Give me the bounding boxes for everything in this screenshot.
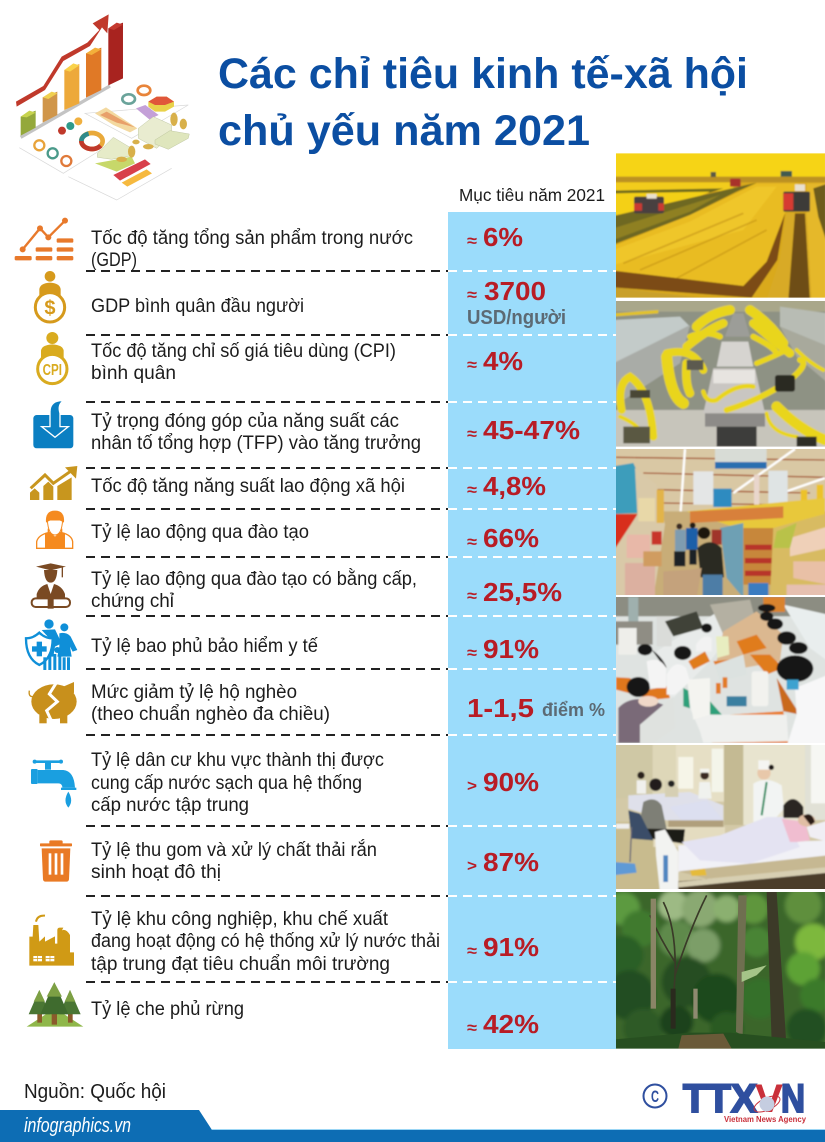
label: industrial zones: tập trung đạt tiêu chuẩn môi trường (91, 954, 390, 975)
title: Các chỉ tiêu kinh tế-xã hội (218, 50, 748, 98)
label: industrial zones (91, 909, 440, 975)
label: CPI: Tốc độ tăng chỉ số giá tiêu dùng (CPI) (91, 341, 396, 362)
label: solid waste: Tỷ lệ thu gom và xử lý chất thải rắn (91, 839, 377, 861)
label: solid waste (91, 839, 377, 883)
value: GDP per capita (467, 276, 566, 329)
label: poverty reduction: (theo chuẩn nghèo đa chiều) (91, 704, 330, 725)
value: health insurance: ≈ (467, 645, 477, 662)
icon: trash bin (40, 840, 72, 882)
value: forest cover: 42% (483, 1009, 539, 1039)
source: Nguồn: Quốc hội (24, 1081, 166, 1103)
value: GDP per capita: USD/người (467, 307, 566, 329)
value: CPI (467, 346, 523, 376)
label: TFP (91, 411, 421, 454)
label: labour productivity: Tốc độ tăng năng suất lao động xã hội (91, 476, 405, 497)
value: GDP growth: ≈ (467, 233, 477, 250)
label: health insurance: Tỷ lệ bao phủ bảo hiểm y tế (91, 636, 318, 657)
footer site name: infographics.vn (24, 1115, 131, 1137)
label: poverty reduction: Mức giảm tỷ lệ hộ nghèo (91, 682, 297, 703)
label: CPI (91, 341, 396, 384)
label: certified workers: Tỷ lệ lao động qua đào tạo có bằng cấp, (91, 568, 417, 590)
logo: TTXVN: N (781, 1077, 805, 1121)
footer bar (0, 1110, 825, 1142)
label: TFP: Tỷ trọng đóng góp của năng suất các (91, 411, 399, 432)
label: solid waste: sinh hoạt đô thị (91, 862, 221, 883)
icon: line chart over bars (15, 218, 73, 260)
logo: TTXVN: V (755, 1077, 783, 1121)
value: trained workers: 66% (483, 523, 539, 553)
icon: shield and family (26, 619, 77, 670)
title: chủ yếu năm 2021 (218, 107, 590, 155)
value: labour productivity: ≈ (467, 482, 477, 499)
row: TFP (33, 401, 580, 454)
label: GDP growth: Tốc độ tăng tổng sản phẩm trong nước (91, 228, 413, 249)
logo: TTXVN: Vietnam News Agency (724, 1114, 806, 1124)
value: forest cover: ≈ (467, 1020, 477, 1037)
icon: graduate with diploma (32, 563, 70, 609)
value: CPI: ≈ (467, 357, 477, 374)
icon: person with CPI coin (38, 332, 67, 384)
label: forest cover: Tỷ lệ che phủ rừng (91, 999, 244, 1020)
value: GDP growth: 6% (483, 222, 523, 252)
value: industrial zones: 91% (483, 932, 539, 962)
photo: rice harvest (613, 150, 825, 300)
panel: target values background (448, 212, 616, 1049)
icon: person with CPI coin: CPI (43, 362, 62, 379)
label: GDP growth: (GDP) (91, 250, 137, 271)
logo: TTXVN (644, 1077, 806, 1124)
value: labour productivity: 4,8% (483, 471, 546, 501)
photo: car factory robots (613, 298, 825, 450)
label: certified workers (91, 568, 417, 612)
icon: broken piggy bank (29, 682, 77, 725)
value: clean water: 90% (483, 767, 539, 797)
icon: factory (29, 916, 74, 966)
label: trained workers: Tỷ lệ lao động qua đào tạo (91, 522, 309, 543)
icon: rising bars and arrow (30, 466, 77, 500)
row: industrial zones (29, 909, 539, 975)
row: CPI (38, 332, 523, 384)
row: GDP growth (15, 218, 523, 271)
column heading: Mục tiêu năm 2021 (459, 185, 605, 205)
value: solid waste: > (467, 858, 477, 875)
logo: TTXVN: C (651, 1087, 659, 1106)
value: CPI: 4% (483, 346, 523, 376)
value: certified workers: 25,5% (483, 577, 562, 607)
icon: water tap and drop (31, 760, 76, 808)
icon: worker (37, 511, 73, 548)
photo: garment workers (613, 595, 825, 746)
row: clean water (31, 750, 539, 816)
row: trained workers (37, 511, 539, 553)
label: CPI: bình quân (91, 363, 176, 384)
row: certified workers (32, 563, 562, 612)
row: poverty reduction (29, 682, 605, 725)
value: clean water: > (467, 778, 477, 795)
label: certified workers: chứng chỉ (91, 591, 175, 612)
photo: supermarket (613, 446, 825, 598)
label: GDP growth (91, 228, 413, 271)
value: industrial zones: ≈ (467, 943, 477, 960)
label: poverty reduction (91, 682, 330, 725)
value: health insurance: 91% (483, 634, 539, 664)
value: TFP: 45-47% (483, 415, 580, 445)
photo: hospital ward (613, 742, 825, 892)
value: poverty reduction: điểm % (542, 700, 605, 720)
illustration: isometric charts and money (16, 14, 189, 200)
label: clean water: cung cấp nước sạch qua hệ thống (91, 773, 362, 794)
title (218, 50, 748, 155)
row: labour productivity (30, 466, 546, 501)
value: TFP: ≈ (467, 426, 477, 443)
label: clean water: cấp nước tập trung (91, 795, 249, 816)
label: clean water (91, 750, 384, 816)
label: industrial zones: Tỷ lệ khu công nghiệp, khu chế xuất (91, 909, 389, 930)
value: solid waste: 87% (483, 847, 539, 877)
row: solid waste (40, 839, 539, 883)
value: poverty reduction: 1-1,5 (467, 693, 534, 723)
row: health insurance (26, 619, 539, 670)
photo: forest (616, 892, 825, 1049)
logo: TTXVN: TTX (683, 1077, 757, 1121)
icon: arrow into box (33, 401, 73, 448)
label: industrial zones: đang hoạt động có hệ thống xử lý nước thải (91, 931, 440, 952)
icon: person with dollar coin: $ (44, 298, 56, 320)
value: GDP growth (467, 222, 523, 252)
value: trained workers: ≈ (467, 534, 477, 551)
label: TFP: nhân tố tổng hợp (TFP) vào tăng trưởng (91, 433, 421, 454)
value: poverty reduction (467, 693, 605, 723)
icon: person with dollar coin (35, 271, 65, 322)
row: forest cover (27, 982, 539, 1039)
value: GDP per capita: ≈ (467, 287, 477, 304)
icon: pine trees (27, 982, 83, 1027)
label: clean water: Tỷ lệ dân cư khu vực thành thị được (91, 750, 384, 771)
value: certified workers: ≈ (467, 588, 477, 605)
row: GDP per capita (35, 271, 566, 329)
label: GDP per capita: GDP bình quân đầu người (91, 296, 304, 317)
value: GDP per capita: 3700 (484, 276, 546, 306)
